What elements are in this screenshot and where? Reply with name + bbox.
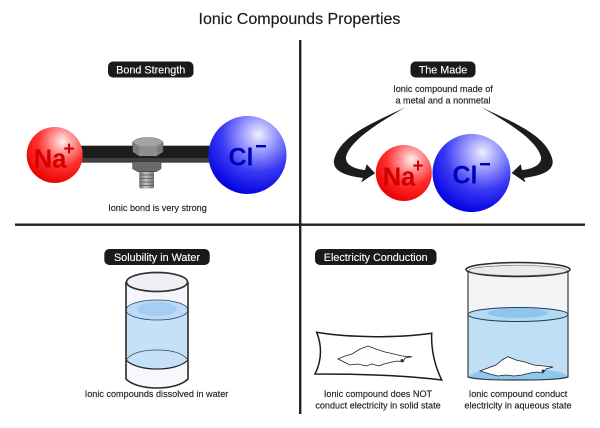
atom: chlorine: Cl	[228, 144, 254, 172]
atom: sodium: +	[63, 139, 75, 160]
icon: glass of water	[126, 272, 188, 388]
atom: sodium	[376, 145, 432, 201]
title: Ionic Compounds Properties	[199, 11, 400, 28]
caption: solubility: Ionic compounds dissolved in water	[85, 389, 228, 399]
icon: bolt	[133, 138, 163, 188]
heading: electricity	[315, 249, 436, 265]
caption: bond strength: Ionic bond is very strong	[108, 203, 207, 213]
arrow: left	[334, 107, 406, 182]
panel: the made	[334, 62, 553, 212]
caption: solid state: Ionic compound does NOT	[324, 389, 432, 399]
panel: bond strength	[27, 62, 286, 213]
atom: sodium: Na	[34, 145, 67, 173]
heading: solubility	[104, 249, 210, 265]
caption: aqueous state: electricity in aqueous state	[464, 400, 572, 410]
heading: solubility: Solubility in Water	[114, 252, 200, 264]
heading: bond strength: Bond Strength	[116, 64, 185, 76]
heading: bond strength	[108, 62, 194, 78]
description: the made: Ionic compound made of	[393, 84, 493, 94]
icon: solid compound on paper	[315, 332, 442, 380]
atom: sodium: Na	[383, 164, 416, 192]
atom: chlorine	[208, 116, 286, 194]
heading: the made	[410, 62, 476, 78]
atom: chlorine: Cl	[452, 162, 478, 190]
atom: sodium: +	[412, 156, 424, 177]
heading: electricity: Electricity Conduction	[324, 252, 428, 264]
description: the made: a metal and a nonmetal	[395, 96, 491, 106]
atom: sodium	[27, 127, 83, 183]
panel: solubility in water	[85, 249, 228, 399]
icon: beaker with dissolved compound	[466, 262, 570, 380]
atom: chlorine	[432, 134, 510, 212]
arrow: right	[481, 107, 553, 182]
caption: solid state: conduct electricity in solid state	[315, 400, 441, 410]
heading: the made: The Made	[419, 64, 467, 76]
bond bar	[78, 146, 218, 163]
caption: aqueous state: Ionic compound conduct	[469, 389, 567, 399]
panel: electricity conduction	[315, 249, 572, 410]
